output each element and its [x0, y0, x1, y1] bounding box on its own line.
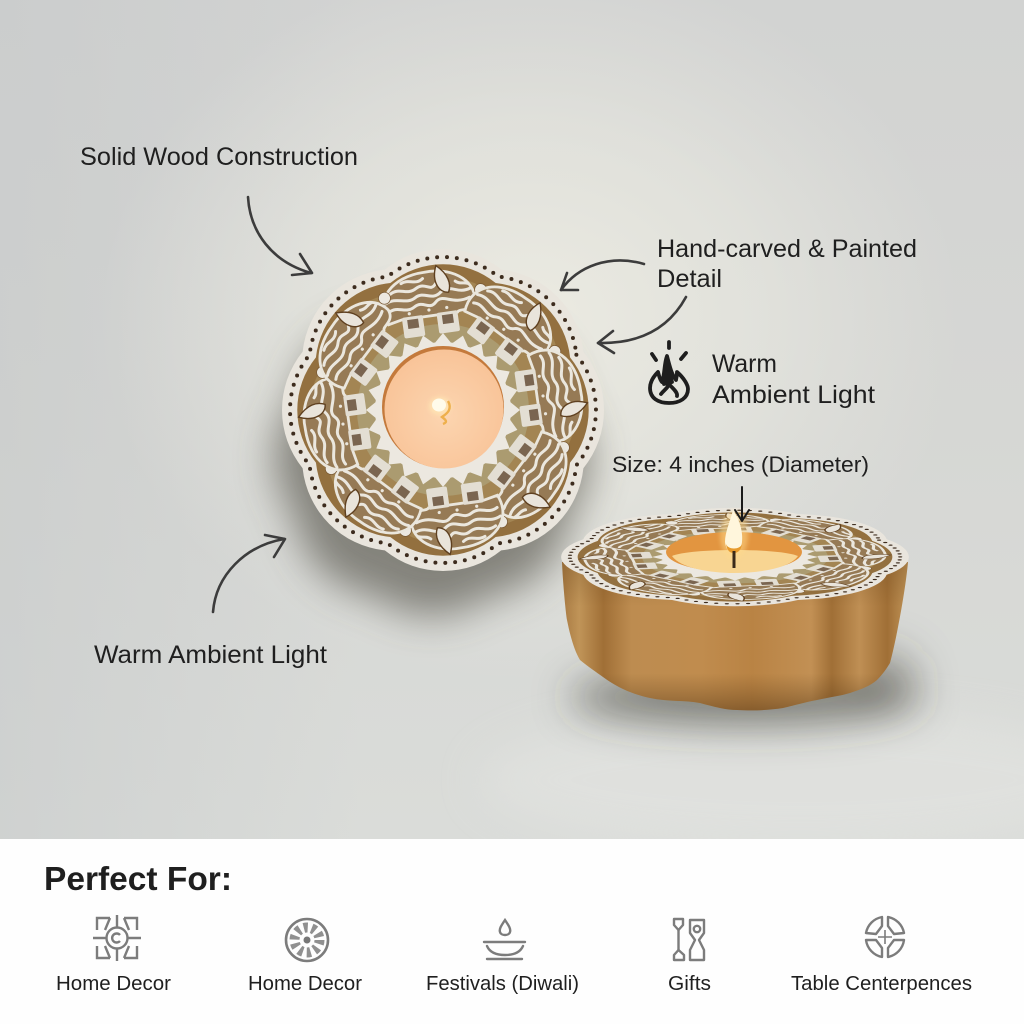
panel: Perfect For — [0, 839, 1024, 1024]
shadow: side-view holder — [570, 649, 920, 725]
icon: gifts — [674, 919, 704, 960]
arrow: to light — [213, 535, 285, 612]
side-view carved holder — [561, 508, 909, 710]
icon: flame — [650, 342, 688, 403]
arrow: size pointer — [735, 487, 749, 521]
shadow: top-view holder — [274, 300, 590, 616]
icon: home decor rosette — [286, 919, 328, 961]
arrow: to carved rim upper — [561, 260, 644, 290]
icon: table centerpiece — [866, 917, 904, 957]
wood body — [562, 562, 908, 710]
title: Solid Wood Construction: Solid Wood Construction — [80, 143, 358, 171]
label: Festivals: Festivals (Diwali) — [426, 973, 579, 995]
label: Hand-carved & Painted Detail: Detail — [657, 265, 722, 293]
arrow: to carved rim right — [598, 297, 686, 353]
label: Warm Ambient Light (right) — [712, 350, 875, 409]
top-view carved holder — [282, 249, 604, 571]
label: Warm Ambient Light (right): Ambient Light — [712, 381, 875, 409]
arrow: to wood edge — [248, 197, 312, 275]
heading: Perfect For: Perfect For: — [44, 860, 232, 897]
lit candle well — [666, 532, 802, 573]
label: Size 4 inches: Size: 4 inches (Diameter) — [612, 452, 869, 477]
label: Warm Ambient Light (right): Warm — [712, 350, 777, 378]
label: Warm Ambient Light (left): Warm Ambient Light — [94, 641, 327, 669]
carved top face — [561, 508, 909, 606]
label: Home Decor: Home Decor — [56, 973, 171, 995]
label: Gifts: Gifts — [668, 973, 711, 995]
label: Table Centerpences: Table Centerpences — [791, 973, 972, 995]
candle flame — [720, 510, 748, 568]
icon: diya lamp — [484, 920, 525, 959]
carved scalloped disc — [282, 249, 604, 571]
tealight candle — [382, 346, 504, 468]
label: Hand-carved & Painted Detail: Hand-carved & Painted — [657, 235, 917, 263]
label: Home Decor second: Home Decor — [248, 973, 362, 995]
label: Hand-carved & Painted Detail — [657, 235, 917, 293]
icon: home decor sun — [93, 915, 141, 961]
